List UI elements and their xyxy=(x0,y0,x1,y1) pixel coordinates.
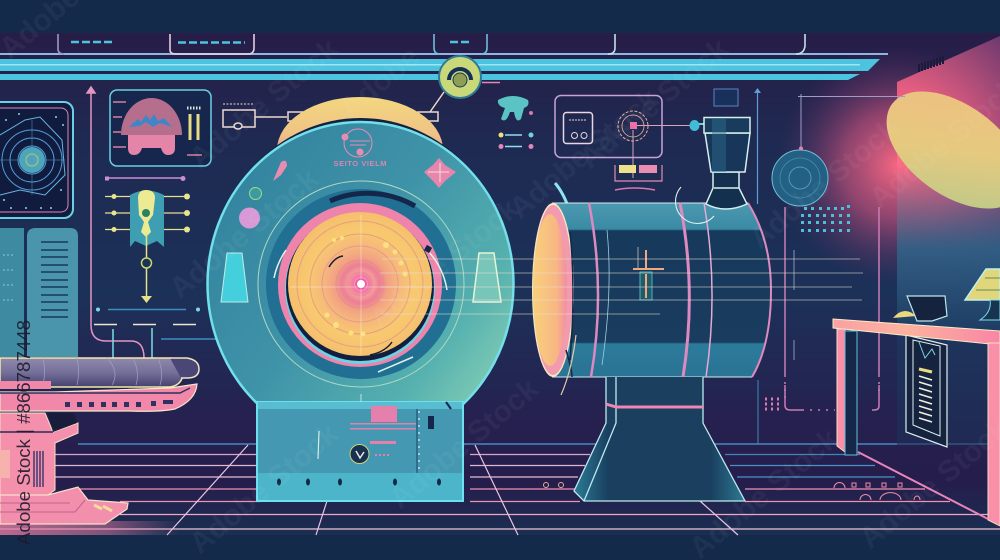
control panel xyxy=(555,96,662,158)
watermark text: Adobe Stock xyxy=(163,162,325,305)
back right wall xyxy=(897,36,1000,445)
blue arrow xyxy=(754,88,761,204)
left panel: radar map xyxy=(0,102,73,218)
bed foot xyxy=(0,487,128,524)
watermark text: Adobe xyxy=(333,40,426,125)
yellow diagram xyxy=(105,176,190,303)
top brackets xyxy=(58,34,805,54)
pink diamond badge xyxy=(424,158,456,188)
watermark text: Adobe Stock xyxy=(573,32,735,175)
hanging sphere xyxy=(772,146,828,206)
scanner base xyxy=(257,394,463,501)
orange cross symbol xyxy=(633,247,664,300)
cylinder mouth xyxy=(532,203,574,377)
pink arrow xyxy=(87,87,144,358)
thin pointer lines xyxy=(798,94,905,148)
cylinder scanner xyxy=(532,203,771,501)
left trapezoid xyxy=(221,253,248,302)
small chart box xyxy=(714,89,738,106)
swatch tray xyxy=(615,165,662,190)
pink bracket lines xyxy=(758,207,879,444)
stock id text: Adobe Stock | #866787448 xyxy=(14,320,34,545)
brain panel xyxy=(110,90,211,166)
pink ring xyxy=(278,203,442,367)
scanner label: SEITO VIELM xyxy=(334,159,386,168)
floor symbols xyxy=(544,482,920,500)
watermark text: Adobe Stock xyxy=(383,372,545,515)
dark ring xyxy=(266,189,456,379)
red glow xyxy=(760,33,1000,333)
lilac badge xyxy=(239,208,260,228)
thin circle overlay xyxy=(676,187,714,223)
outer thin ring xyxy=(258,181,464,387)
gauge at ceiling xyxy=(430,56,500,112)
bed capsule xyxy=(0,358,183,387)
scanner dome xyxy=(277,97,443,203)
wall chart panel xyxy=(897,335,1000,447)
watermark text: Adobe Stock xyxy=(503,82,665,225)
left panel: book pages xyxy=(0,228,78,357)
stand xyxy=(574,377,745,501)
green badge xyxy=(250,188,262,200)
connector to chimney xyxy=(633,120,705,178)
cylinder bands xyxy=(589,203,712,377)
pink pin icon xyxy=(273,161,287,181)
jellyfish icon xyxy=(498,96,533,120)
dot matrix xyxy=(801,205,850,232)
icon legend lines xyxy=(498,132,534,149)
horizontal beam lines xyxy=(380,259,863,314)
floor dither xyxy=(0,521,180,535)
ceiling bars xyxy=(0,53,888,80)
scanner xyxy=(208,97,514,501)
table xyxy=(833,319,1000,526)
watermark text: Adobe Stock xyxy=(183,32,345,175)
lower left wires xyxy=(94,308,216,358)
watermark text: Adobe Stock xyxy=(743,112,905,255)
cylinder body xyxy=(552,203,771,377)
vent slots xyxy=(919,56,943,72)
scanner shadow rim xyxy=(210,118,510,442)
teal arc xyxy=(555,183,578,260)
yellow lens xyxy=(288,212,432,356)
chimney xyxy=(704,118,750,209)
patient bed xyxy=(0,358,199,524)
yellow oval light xyxy=(865,68,1000,232)
scanner body xyxy=(208,122,514,446)
watermark text: Adobe Stock xyxy=(363,192,525,335)
bed pedestal xyxy=(0,413,78,495)
floor lines xyxy=(0,444,1000,535)
bed platform xyxy=(0,384,197,411)
scanner label icon xyxy=(342,129,372,157)
connector boxes xyxy=(223,104,438,129)
right trapezoid xyxy=(473,253,501,302)
watermark text: Adobe Stock xyxy=(183,417,345,560)
desk items xyxy=(893,269,1000,321)
